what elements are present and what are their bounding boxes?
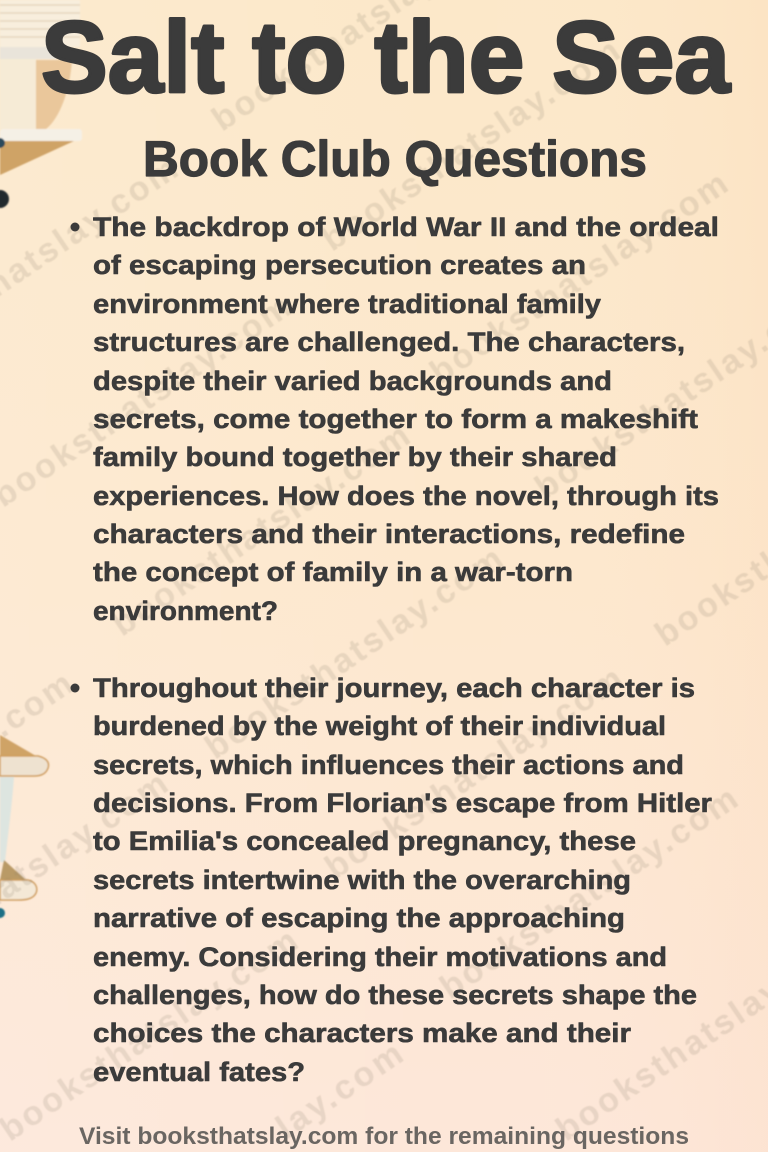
- question 1: secrets, come together to form a makeshift: [93, 404, 698, 434]
- subtitle: Book Club Questions: [143, 131, 647, 187]
- decoration: lower left shelves: [0, 735, 49, 918]
- question 2: Throughout their journey, each character is: [93, 673, 695, 703]
- question 1: experiences. How does the novel, through its: [93, 481, 719, 511]
- question 2: to Emilia's concealed pregnancy, these: [93, 826, 636, 856]
- decoration: upper left shelves: [0, 0, 82, 208]
- question 2: enemy. Considering their motivations and: [93, 942, 667, 972]
- bullet 2: [70, 684, 80, 692]
- question 1: structures are challenged. The characters,: [93, 327, 685, 357]
- question 1: family bound together by their shared: [93, 442, 617, 472]
- question 2: [70, 673, 713, 1087]
- watermarks: booksthatslay.com: [0, 921, 305, 1149]
- watermarks: booksthatslay.com: [105, 416, 417, 644]
- question 2: decisions. From Florian's escape from Hitler: [93, 788, 713, 818]
- question 2: challenges, how do these secrets shape the: [93, 980, 697, 1010]
- question 1: [70, 212, 719, 626]
- watermarks: booksthatslay.com: [433, 779, 745, 1007]
- question 2: secrets intertwine with the overarching: [93, 865, 631, 895]
- question 1: environment where traditional family: [93, 289, 601, 319]
- question 1: despite their varied backgrounds and: [93, 366, 612, 396]
- title: Salt to the Sea: [41, 2, 731, 114]
- bullet 1: [70, 222, 80, 232]
- question 2: choices the characters make and their: [93, 1018, 632, 1048]
- question 1: of escaping persecution creates an: [93, 250, 586, 280]
- question 2: narrative of escaping the approaching: [93, 903, 625, 933]
- question 2: eventual fates?: [93, 1057, 305, 1087]
- question 1: the concept of family in a war-torn: [93, 557, 573, 587]
- watermarks: booksthatslay.com: [318, 659, 630, 887]
- watermarks: booksthatslay.com: [315, 31, 627, 259]
- question 2: burdened by the weight of their individual: [93, 711, 666, 741]
- question 1: characters and their interactions, redefine: [93, 519, 685, 549]
- question 2: secrets, which influences their actions and: [93, 750, 684, 780]
- watermarks: booksthatslay.com: [198, 539, 510, 767]
- question 1: The backdrop of World War II and the ordeal: [93, 212, 719, 242]
- question 1: environment?: [93, 596, 278, 626]
- watermarks: lay.com: [269, 1035, 410, 1147]
- footer: Visit booksthatslay.com for the remaining questions: [79, 1123, 689, 1150]
- watermarks: booksthatslay.com: [423, 164, 735, 392]
